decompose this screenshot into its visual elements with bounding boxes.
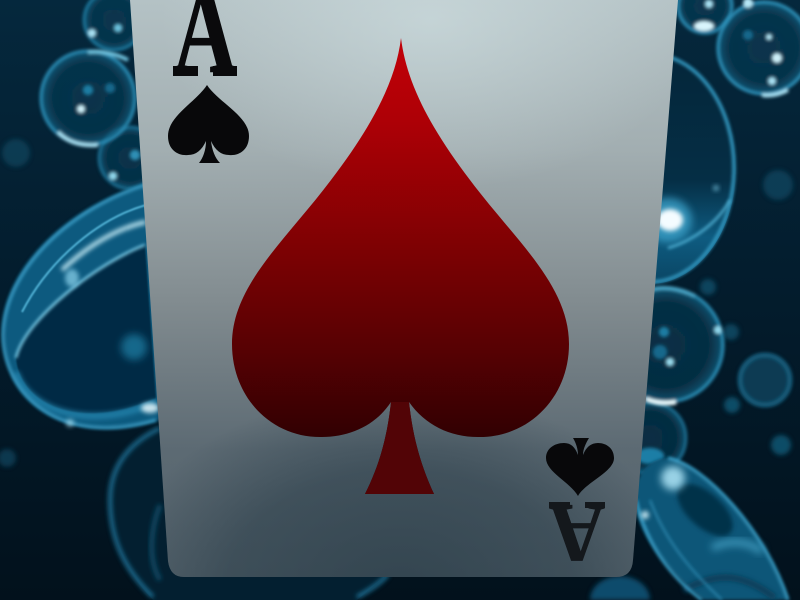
top-left black spade: [168, 85, 249, 163]
bubble: right middle: [609, 288, 723, 403]
bubble: lower right lens: [635, 458, 788, 600]
card face: [130, 0, 678, 577]
bubble: top right small: [678, 0, 732, 33]
bubble: lower left lens: [110, 428, 388, 600]
bubble: large left lens: [3, 182, 160, 428]
playing card: [130, 0, 678, 580]
bottom-right black spade: [546, 438, 614, 496]
bubble: right below: [614, 402, 686, 474]
large red spade: [232, 38, 569, 494]
bubble: right large lens: [564, 52, 736, 284]
bubble: top right: [718, 0, 800, 95]
blurred background specks: [0, 139, 793, 467]
bubble: bottom small: [590, 576, 650, 600]
bottom-right inverted letter A: A: [548, 486, 605, 580]
bubble: left under card: [99, 127, 161, 189]
bubble: upper left: [41, 51, 135, 145]
bubble: top left small: [84, 0, 144, 50]
bubble: far right ring: [740, 355, 790, 405]
